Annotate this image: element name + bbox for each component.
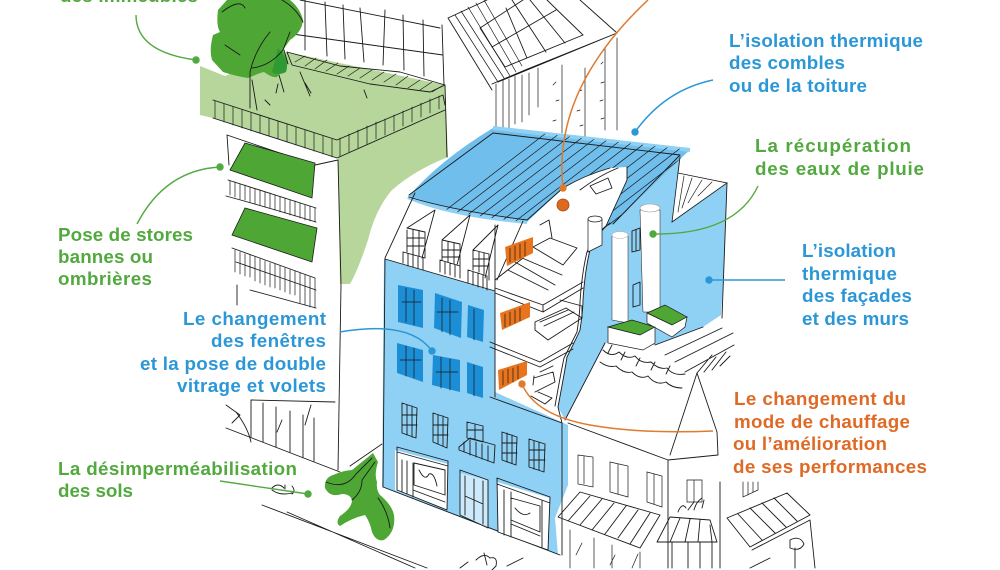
label: facade insulation: et des murs — [802, 308, 909, 329]
tiled roof — [600, 327, 734, 388]
roof marks — [252, 72, 367, 110]
panel: green roof building — [200, 0, 448, 470]
leader: heating — [518, 380, 713, 432]
label: window replacement: et la pose de double — [140, 353, 326, 374]
label: rainwater harvesting — [755, 135, 924, 179]
label: heating change: de ses performances — [733, 456, 927, 477]
label: facade insulation: thermique — [802, 263, 897, 284]
label: roof insulation: L’isolation thermique — [729, 30, 923, 51]
panel: blue renovated building — [382, 128, 732, 555]
label: roof insulation: ou de la toiture — [729, 75, 867, 96]
roof hatch — [455, 0, 522, 82]
leader: roof insulation — [631, 80, 713, 136]
leader: awnings — [137, 163, 224, 224]
roof outline — [448, 0, 617, 90]
leader: rainwater — [649, 186, 758, 238]
solar panel grid — [480, 0, 583, 67]
icon: cafe awning — [657, 517, 717, 568]
rear white roof triangle — [672, 173, 727, 222]
roof hatching — [446, 134, 684, 226]
pedestrian scribble — [460, 553, 523, 570]
bed — [535, 300, 582, 340]
panel: building cross-section — [490, 157, 727, 555]
label: awnings: ombrières — [58, 268, 152, 289]
label: awnings: bannes ou — [58, 246, 153, 267]
upper rear windows — [632, 228, 640, 307]
roof light edge — [408, 128, 690, 222]
label: awnings — [58, 224, 193, 289]
upper glass storey — [285, 0, 444, 85]
rear wall lines — [496, 38, 617, 140]
label: window replacement — [140, 308, 327, 396]
sidewalk lines — [262, 505, 427, 568]
street facade outline — [568, 373, 720, 568]
third-level windows — [402, 403, 545, 472]
label: facade insulation — [802, 240, 912, 329]
label: window replacement: vitrage et volets — [177, 375, 326, 396]
label: roof insulation — [729, 30, 923, 96]
panel: rear building with solar panels — [448, 0, 617, 140]
blue wall curve — [555, 157, 727, 555]
roof parapet — [213, 95, 445, 158]
leader: wall insulation — [705, 276, 785, 284]
label: roof insulation: des combles — [729, 52, 845, 73]
roof blue — [408, 128, 690, 226]
bath and small chimney — [508, 220, 577, 290]
label: window replacement: des fenêtres — [211, 330, 326, 351]
icon: right street awning — [727, 493, 815, 568]
tower walls — [227, 85, 447, 470]
leader: vegetation — [136, 15, 200, 64]
window bars — [400, 288, 474, 396]
street level glazing — [570, 530, 640, 568]
balcony railings — [226, 180, 316, 308]
side wall blue — [558, 157, 727, 420]
icon: upper awning — [230, 143, 315, 198]
dormer windows — [403, 210, 435, 270]
floors — [490, 221, 583, 423]
label: soil de-sealing — [58, 458, 297, 501]
street windows — [578, 455, 758, 507]
shop fronts — [395, 450, 448, 510]
label: heating change: mode de chauffage — [734, 411, 910, 432]
label: heating change — [733, 388, 927, 477]
label: heating change: Le changement du — [734, 388, 906, 409]
icon: ground vegetation — [325, 453, 394, 540]
leader: solar and boiler — [559, 0, 648, 192]
icon: left street awning — [558, 492, 660, 548]
label: heating change: ou l’amélioration — [733, 433, 887, 454]
leader: ground — [220, 481, 312, 498]
upper window shutters — [398, 285, 484, 342]
icon: tree on roof — [211, 0, 303, 108]
cafe sign — [678, 498, 704, 512]
leader lines — [136, 0, 785, 498]
roof terrace hatch band — [287, 52, 445, 92]
label: rainwater harvesting: des eaux de pluie — [755, 158, 924, 179]
roof hatch interior — [580, 168, 618, 194]
stairs — [531, 366, 555, 404]
icon: rooftop planters — [608, 305, 687, 350]
panel: neighbouring right buildings — [460, 327, 815, 570]
chimneys — [588, 204, 660, 323]
bicycle sketch — [272, 485, 294, 494]
green roof and wall shade — [200, 52, 448, 284]
label: soil de-sealing: des sols — [58, 480, 133, 501]
leader: windows — [340, 329, 436, 355]
balconies and awnings — [226, 143, 317, 308]
icon: lower awning — [232, 208, 317, 262]
label: facade insulation: L’isolation — [802, 240, 896, 261]
icon: radiators — [498, 237, 533, 390]
icon: boiler — [557, 199, 569, 211]
label: soil de-sealing: La désimperméabilisation — [58, 458, 297, 479]
label: rainwater harvesting: La récupération — [755, 135, 911, 156]
label: awnings: Pose de stores — [58, 224, 193, 245]
label: facade insulation: des façades — [802, 285, 912, 306]
mansard roof line — [383, 193, 560, 555]
lower window shutters — [397, 343, 483, 398]
label: window replacement: Le changement — [183, 308, 327, 329]
facade blue — [382, 259, 568, 555]
balcony — [459, 438, 495, 463]
panel: lower left shopfront sketch — [226, 400, 427, 568]
